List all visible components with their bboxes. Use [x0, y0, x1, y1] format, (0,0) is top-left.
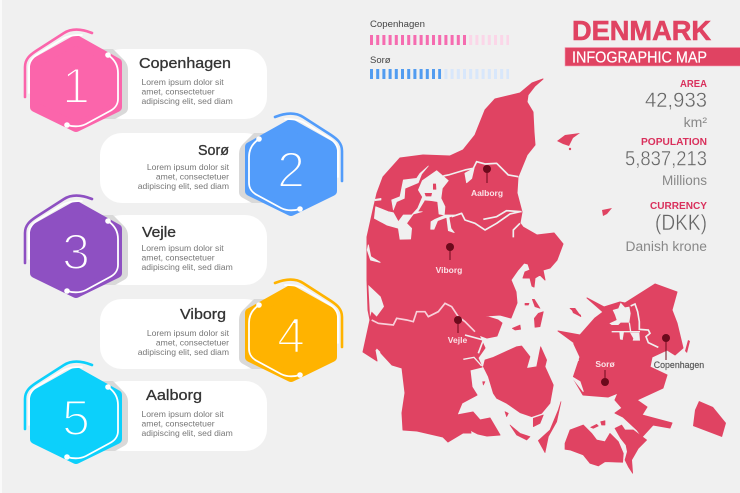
pin: Copenhagen: Copenhagen [654, 360, 704, 370]
bar: Copenhagen: Copenhagen [370, 19, 425, 30]
icon: hexagon 2 [249, 114, 342, 212]
pin: Aalborg: Aalborg [471, 188, 503, 198]
region: Jutland [363, 79, 563, 442]
stat: population: Millions [662, 173, 707, 188]
heading: Viborg: Viborg [180, 307, 226, 323]
pin: Vejle: Vejle [448, 335, 467, 345]
panel: item 2 Sorø [100, 114, 342, 212]
heading: Vejle: Vejle [142, 225, 176, 241]
fjords and region borders: north Jutland [367, 162, 522, 262]
stat: population: 5,837,213 [625, 148, 707, 170]
icon: hexagon 2: 2 [277, 142, 305, 198]
text block: amet, consectetuer [142, 418, 215, 428]
text block: amet, consectetuer [156, 172, 229, 182]
stat: currency: CURRENCY [650, 200, 707, 212]
text block: Lorem ipsum dolor sit [147, 328, 230, 338]
stat: currency [626, 200, 707, 254]
text block: adipiscing elit, sed diam [142, 262, 233, 272]
fjords: Limfjord [374, 166, 455, 239]
text block: adipiscing elit, sed diam [138, 181, 229, 191]
text block: adipiscing elit, sed diam [138, 347, 229, 357]
text block: adipiscing elit, sed diam [142, 96, 233, 106]
icon: hexagon 3 [25, 196, 118, 294]
islands: Lolland, Falster [565, 421, 647, 473]
icon: hexagon 5 [25, 362, 118, 460]
icon: hexagon 4: 4 [277, 308, 305, 364]
pin: Viborg [436, 243, 462, 275]
text block: Lorem ipsum dolor sit [147, 162, 230, 172]
heading: Sorø: Sorø [198, 143, 229, 159]
panel: item 5 Aalborg [25, 362, 267, 460]
stat: currency: Danish krone [626, 239, 707, 254]
stat: population: POPULATION [641, 136, 707, 148]
bar: Sorø: Sorø [370, 55, 391, 66]
icon: hexagon 1 [25, 30, 118, 128]
region: Zealand [558, 284, 683, 437]
text block: amet, consectetuer [142, 86, 215, 96]
pin: Vejle [448, 316, 467, 345]
fjords and region borders: south Jutland [368, 285, 483, 366]
stat: currency: (DKK) [655, 210, 707, 235]
icon: hexagon 3: 3 [62, 224, 90, 280]
stat: area: 42,933 [645, 89, 707, 112]
text block: adipiscing elit, sed diam [142, 428, 233, 438]
islands: Samso and Kattegat [512, 299, 581, 330]
progress bars [370, 19, 509, 74]
text block: Lorem ipsum dolor sit [142, 243, 224, 253]
panel: item 3 Vejle [25, 196, 267, 294]
region: Funen and small islands [483, 346, 561, 453]
panel: item 4 Viborg [100, 280, 342, 378]
stat: area: km² [684, 114, 707, 130]
pin: Aalborg [471, 165, 503, 198]
pin: Viborg: Viborg [436, 265, 462, 275]
icon: hexagon 4 [249, 280, 342, 378]
icon: hexagon 5: 5 [62, 390, 90, 446]
islands: Bornholm, Laeso, Anholt and others [557, 133, 726, 437]
subtitle banner: INFOGRAPHIC MAP [572, 50, 707, 66]
fjords and region borders: Zealand [609, 303, 658, 347]
text block: amet, consectetuer [142, 252, 215, 262]
map of Denmark [363, 79, 726, 473]
heading: Aalborg: Aalborg [146, 388, 202, 404]
pin: Copenhagen [654, 334, 704, 370]
title: DENMARK [572, 15, 711, 46]
pin: Sorø [595, 359, 615, 386]
heading: Copenhagen: Copenhagen [139, 56, 231, 72]
stat: population [625, 136, 707, 188]
stat: area: AREA [680, 78, 707, 90]
panel: item 1 Copenhagen [25, 30, 267, 128]
pin: Sorø: Sorø [595, 359, 615, 369]
text block: amet, consectetuer [156, 338, 229, 348]
icon: hexagon 1: 1 [62, 58, 90, 114]
stat: area [645, 78, 707, 130]
text block: Lorem ipsum dolor sit [142, 409, 224, 419]
text block: Lorem ipsum dolor sit [142, 77, 224, 87]
